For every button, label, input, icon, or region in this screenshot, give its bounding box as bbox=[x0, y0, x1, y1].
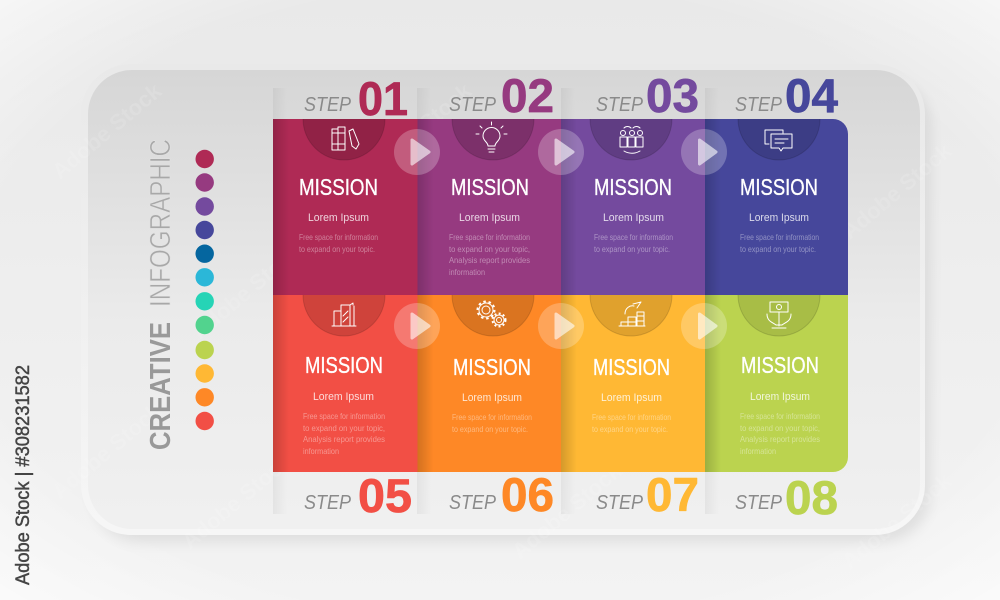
panel: step 07: MISSION bbox=[593, 354, 670, 380]
panel: step 05: Lorem Ipsum bbox=[313, 391, 374, 403]
panel: step 08: information bbox=[740, 446, 776, 456]
panel: step 05: Analysis report provides bbox=[303, 434, 385, 444]
panel: step 08: 08 bbox=[785, 471, 838, 524]
panel: step 02: information bbox=[449, 267, 485, 277]
panel: step 06: MISSION bbox=[453, 354, 531, 380]
panel: step 03 bbox=[561, 69, 706, 295]
panel: step 02: 02 bbox=[501, 69, 554, 122]
vertical title: INFOGRAPHIC bbox=[145, 139, 177, 307]
panel: outer card bbox=[81, 64, 930, 542]
watermark: Adobe Stock bbox=[507, 458, 627, 564]
panel: step 03: STEP bbox=[596, 93, 643, 116]
panel: step 04 bbox=[705, 69, 848, 295]
stock id caption: Adobe Stock | #308231582 bbox=[13, 365, 34, 585]
watermark: Adobe Stock bbox=[837, 138, 957, 244]
panel: step 07: STEP bbox=[596, 491, 643, 514]
watermark: Adobe Stock bbox=[47, 398, 167, 504]
panel: step 03: MISSION bbox=[594, 174, 672, 200]
vertical title bbox=[145, 139, 177, 450]
panel: step 08: STEP bbox=[735, 491, 782, 514]
panel: step 07: to expand on your topic. bbox=[592, 424, 668, 434]
panel: step 07 bbox=[561, 295, 706, 521]
panel: step 04: Lorem Ipsum bbox=[749, 212, 809, 224]
panel: step 08: Lorem Ipsum bbox=[750, 391, 810, 403]
panel: step 01: STEP bbox=[304, 93, 351, 116]
panel: step 05: MISSION bbox=[305, 352, 383, 378]
panel: step 01: MISSION bbox=[299, 174, 378, 200]
panel: step 05: Free space for information bbox=[303, 411, 385, 421]
panel: step 04: 04 bbox=[785, 69, 838, 122]
panel: step 05: 05 bbox=[358, 469, 412, 522]
panel: step 04: MISSION bbox=[740, 174, 818, 200]
panel: step 03: to expand on your topic. bbox=[594, 244, 670, 254]
panel: step 08: Analysis report provides bbox=[740, 434, 820, 444]
watermark bbox=[47, 78, 957, 574]
watermark: Adobe Stock bbox=[687, 288, 807, 394]
panel: step 01 bbox=[273, 72, 418, 295]
panel: step 01: to expand on your topic. bbox=[299, 244, 375, 254]
panel: step 01: Lorem Ipsum bbox=[308, 212, 369, 224]
panel: step 05: information bbox=[303, 446, 339, 456]
play arrows, top row bbox=[394, 129, 727, 175]
watermark: Adobe Stock bbox=[377, 248, 497, 354]
panel: step 06: 06 bbox=[501, 468, 554, 521]
watermark: Adobe Stock bbox=[517, 138, 637, 244]
panel: step 02: to expand on your topic, bbox=[449, 244, 530, 254]
panel: step 08 bbox=[705, 295, 848, 524]
panel: step 08: to expand on your topic, bbox=[740, 423, 820, 433]
panel: step 06 bbox=[418, 295, 562, 521]
panel: step 02: Lorem Ipsum bbox=[459, 212, 520, 224]
colour dots legend bbox=[196, 150, 214, 430]
panel: step 07: 07 bbox=[646, 468, 699, 521]
panel: step 02 bbox=[418, 69, 562, 295]
panel: step 05: to expand on your topic, bbox=[303, 423, 385, 433]
panel: step 06: Free space for information bbox=[452, 412, 532, 422]
panel: step 05: STEP bbox=[304, 491, 351, 514]
vertical title: CREATIVE bbox=[145, 322, 177, 450]
panel: step 02: Analysis report provides bbox=[449, 255, 530, 265]
play arrows, bottom row bbox=[394, 303, 727, 349]
panel: step 01: Free space for information bbox=[299, 232, 378, 242]
panel: step 02: Free space for information bbox=[449, 232, 530, 242]
panel: step 07: Free space for information bbox=[592, 412, 671, 422]
panel: step 04: to expand on your topic. bbox=[740, 244, 816, 254]
panel: step 08: Free space for information bbox=[740, 411, 820, 421]
panel: step 07: Lorem Ipsum bbox=[601, 392, 662, 404]
panel: step 05 bbox=[273, 295, 418, 522]
panel: step 04: Free space for information bbox=[740, 232, 819, 242]
panel: step 06: to expand on your topic. bbox=[452, 424, 528, 434]
panel: step 06: STEP bbox=[449, 491, 496, 514]
panel: step 02: MISSION bbox=[451, 174, 529, 200]
panel: step 06: Lorem Ipsum bbox=[462, 392, 522, 404]
panel: step 03: Lorem Ipsum bbox=[603, 212, 664, 224]
watermark: Adobe Stock bbox=[177, 448, 297, 554]
watermark: Adobe Stock bbox=[357, 78, 477, 184]
watermark: Adobe Stock bbox=[47, 78, 167, 184]
watermark: Adobe Stock bbox=[837, 468, 957, 574]
watermark: Adobe Stock bbox=[187, 238, 307, 344]
panel: step 03: 03 bbox=[646, 69, 699, 122]
panel: step 03: Free space for information bbox=[594, 232, 673, 242]
panel: step 01: 01 bbox=[358, 72, 408, 125]
panel: step 08: MISSION bbox=[741, 352, 819, 378]
panel: step 04: STEP bbox=[735, 93, 782, 116]
panel: step 02: STEP bbox=[449, 93, 496, 116]
